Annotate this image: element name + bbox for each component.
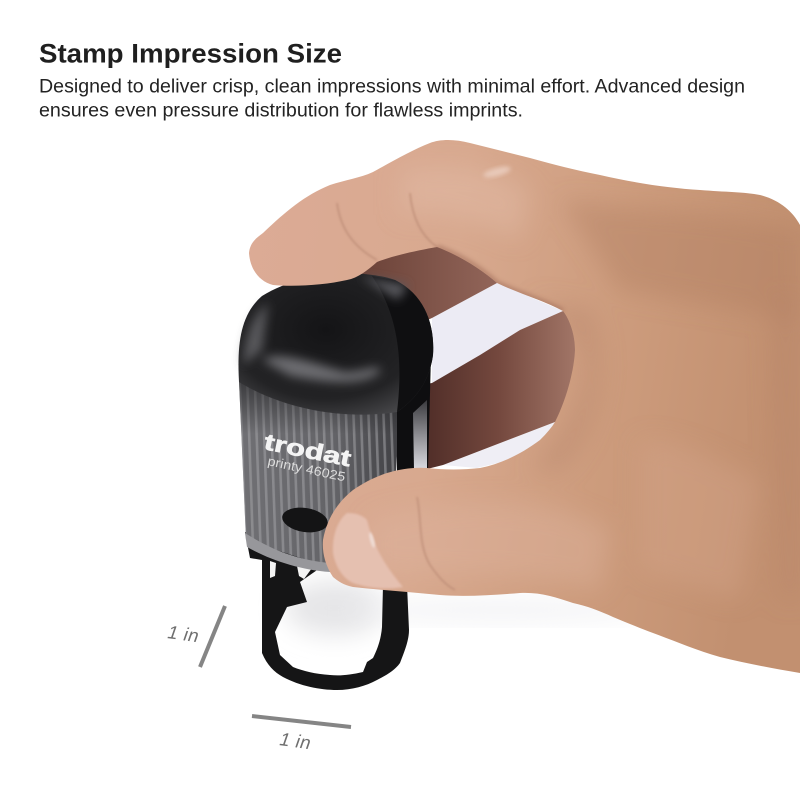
hand shading xyxy=(408,174,786,582)
stamp dome cap xyxy=(238,273,433,415)
stamp brand text: trodat xyxy=(262,428,354,472)
width label: 1 in xyxy=(278,728,312,753)
dimension: height xyxy=(166,606,225,667)
finger creases xyxy=(337,193,455,590)
height label: 1 in xyxy=(166,621,200,646)
thumbnail xyxy=(333,513,403,588)
stamp button xyxy=(280,505,330,535)
hand xyxy=(249,140,800,673)
knuckle highlight xyxy=(482,165,512,179)
description text xyxy=(39,76,745,122)
stamp model text: printy 46025 xyxy=(266,453,347,484)
background fingers xyxy=(360,240,600,472)
title: Stamp Impression Size xyxy=(39,38,342,68)
stamp grey band xyxy=(239,355,431,572)
dimension: width xyxy=(252,716,351,753)
stamp base frame xyxy=(245,532,409,690)
surface shadow xyxy=(285,283,650,636)
description text: Designed to deliver crisp, clean impressions with minimal effort. Advanced design xyxy=(39,76,745,98)
description text: ensures even pressure distribution for flawless imprints. xyxy=(39,100,523,122)
